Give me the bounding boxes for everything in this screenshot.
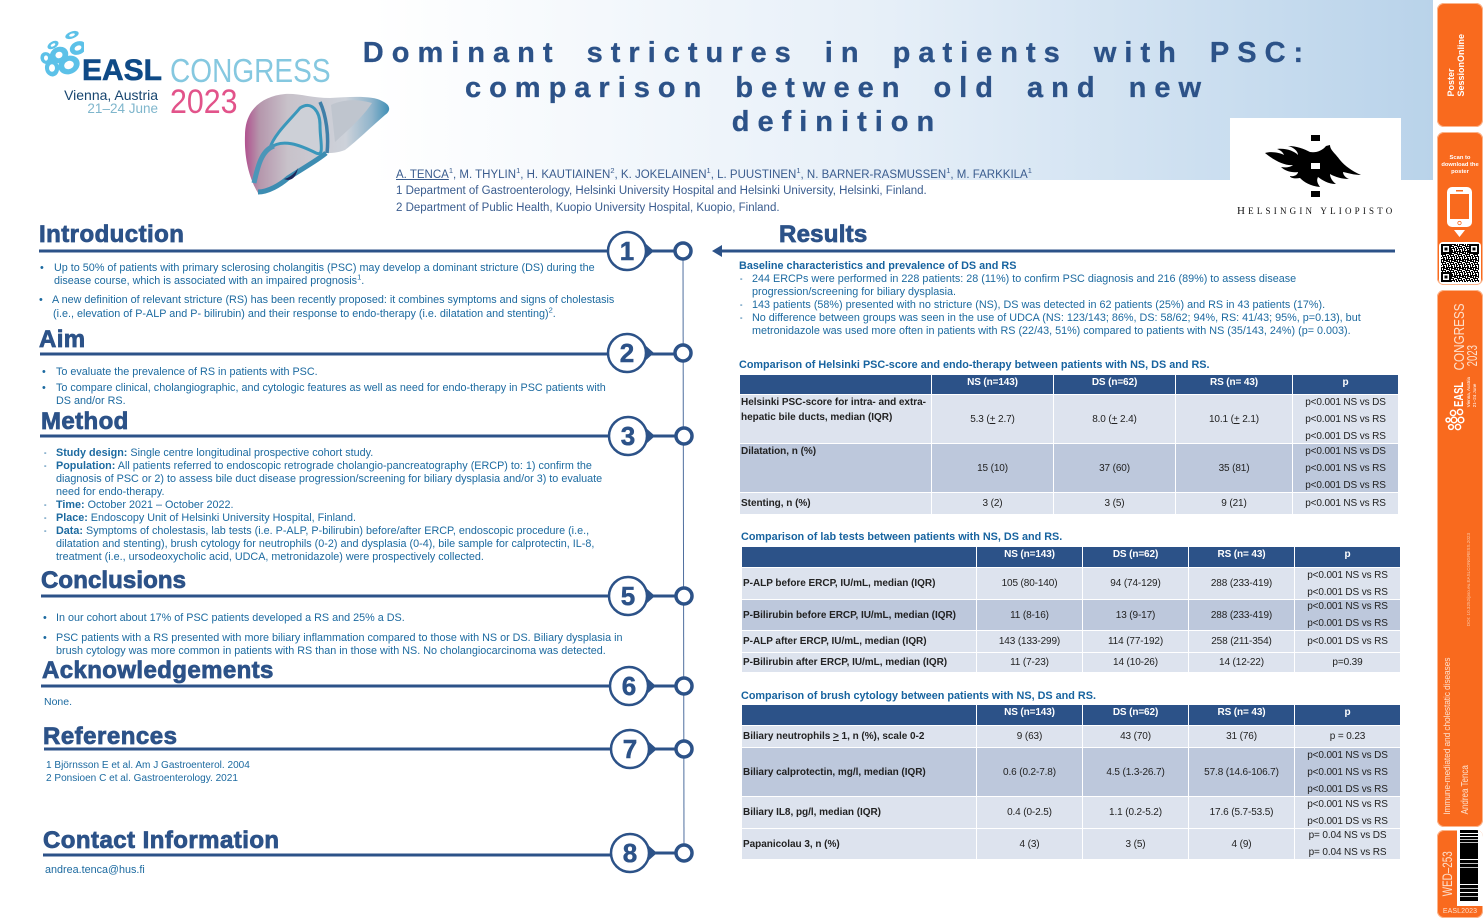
table: brush cytology: p<0.001 DS vs RS <box>1307 816 1388 827</box>
text: baseline characteristics: 244 ERCPs were performed in 228 patients: 28 (11%) to confirm PSC diagnosis and 216 (89%) to assess disease <box>752 273 1296 285</box>
text: references: 1 Björnsson E et al. Am J Gastroenterol. 2004 <box>46 760 250 771</box>
text: conclusions <box>43 612 622 657</box>
sidebar panel: scan to download <box>1437 132 1483 285</box>
sidebar panel: congress details <box>1437 290 1483 827</box>
sidebar year: 2023 <box>1464 345 1481 366</box>
heading: Introduction: Introduction <box>39 221 184 248</box>
text: method: diagnosis of PSC or 2) to assess bile duct disease progression/screening for biliary dysplasia and/or 3) to evaluate <box>56 473 602 485</box>
node 7: 7 <box>623 734 637 764</box>
QR code <box>1439 242 1481 284</box>
table: brush cytology: Biliary neutrophils > 1, n (%), scale 0-2 <box>743 731 924 742</box>
table: brush cytology: 0.4 (0-2.5) <box>1007 807 1052 818</box>
poster id: WED–253 <box>1440 851 1455 896</box>
scan instruction: poster <box>1451 169 1469 175</box>
text: aim: • <box>42 382 46 394</box>
table: brush cytology: Papanicolau 3, n (%) <box>743 838 840 850</box>
table: brush cytology: 0.6 (0.2-7.8) <box>1003 766 1056 778</box>
dates: 21–24 June <box>87 101 158 116</box>
table: lab tests: 288 (233-419) <box>1211 578 1272 589</box>
text: baseline characteristics: Baseline characteristics and prevalence of DS and RS <box>739 260 1016 272</box>
year: 2023 <box>170 83 238 121</box>
table: Helsinki PSC-score and endo-therapy: p<0.001 DS vs RS <box>1305 480 1386 491</box>
text: method: - <box>44 461 46 470</box>
table: Helsinki PSC-score and endo-therapy: p <box>1342 377 1348 388</box>
text: references <box>46 760 250 784</box>
table: brush cytology: Biliary IL8, pg/l, median (IQR) <box>743 807 881 818</box>
sidebar location: 21–24 June <box>1472 384 1477 407</box>
table: lab tests: 114 (77-192) <box>1108 636 1163 647</box>
text: conclusions: • <box>43 632 47 644</box>
authors and affiliations: A. TENCA1, M. THYLIN1, H. KAUTIAINEN2, K. JOKELAINEN1, L. PUUSTINEN1, N. BARNER-RASMUSSEN1, M. FARKKILA1 <box>396 166 1032 181</box>
text: introduction <box>39 262 614 320</box>
text: baseline characteristics: - <box>740 274 742 283</box>
text: aim: To evaluate the prevalence of RS in patients with PSC. <box>56 366 318 378</box>
text: aim: DS and/or RS. <box>56 395 126 407</box>
scan instruction: Scan to <box>1450 155 1470 161</box>
node 2 <box>40 334 691 372</box>
text: method: dilatation and stenting), brush cytology for neutrophils (0-2) and dysplasia (0-4), bile sample for calprotectin, IL-8, <box>56 538 594 550</box>
text: baseline characteristics: - <box>740 313 742 322</box>
text: acknowledgements: None. <box>44 696 72 708</box>
table: lab tests: 288 (233-419) <box>1211 610 1272 620</box>
table: brush cytology <box>742 705 1400 859</box>
timeline spine <box>683 251 684 853</box>
table: brush cytology: p= 0.04 NS vs RS <box>1309 847 1386 858</box>
title: comparison between old and new <box>465 72 1209 104</box>
table: Helsinki PSC-score and endo-therapy: p<0.001 NS vs DS <box>1305 396 1386 408</box>
table: brush cytology: p<0.001 DS vs RS <box>1307 784 1388 795</box>
text: baseline characteristics: No difference between groups was seen in the use of UDCA (NS: 123/143; 86%, DS: 58/62; 94%, RS: 41/43; 95%, p=0.13), but <box>752 312 1361 324</box>
text: method: - <box>44 526 46 535</box>
barcode <box>1457 830 1483 906</box>
icon: phone <box>1447 187 1472 237</box>
text: method: Population: All patients referred to endoscopic retrograde cholangio-pancreatography (ERCP) to: 1) confirm the <box>56 460 592 472</box>
table: Helsinki PSC-score and endo-therapy: NS (n=143) <box>967 377 1018 388</box>
EASL wordmark: EASL <box>82 54 162 87</box>
node 2: 2 <box>620 338 634 368</box>
sidebar congress wordmark: CONGRESS <box>1451 303 1468 370</box>
text: method: - <box>44 513 46 522</box>
table: Helsinki PSC-score and endo-therapy: DS (n=62) <box>1092 377 1137 388</box>
sidebar label: Poster Session Online: SessionOnline <box>1456 34 1466 97</box>
table: brush cytology: DS (n=62) <box>1113 707 1158 718</box>
logo wordmark: HELSINGIN YLIOPISTO <box>1237 205 1396 217</box>
table: lab tests <box>742 547 1400 672</box>
table: Helsinki PSC-score and endo-therapy: Helsinki PSC-score for intra- and extra- <box>741 397 926 408</box>
table: lab tests: 258 (211-354) <box>1211 636 1272 647</box>
text: method: Data: Symptoms of cholestasis, lab tests (i.e. P-ALP, P-bilirubin) before/after ERCP, endoscopic procedure (i.e., <box>56 525 589 537</box>
icon: hexagon cluster <box>40 30 84 76</box>
authors and affiliations: 2 Department of Public Health, Kuopio University Hospital, Kuopio, Finland. <box>396 202 780 214</box>
table: brush cytology: 3 (5) <box>1126 838 1145 850</box>
text: introduction: (i.e., elevation of P-ALP and P- bilirubin) and their response to endo-therapy (i.e. dilatation and stenting)2. <box>53 305 556 320</box>
table: brush cytology: 4 (3) <box>1020 838 1039 850</box>
text: conclusions: • <box>43 612 47 624</box>
node 5: 5 <box>621 581 635 611</box>
authors and affiliations: 1 Department of Gastroenterology, Helsinki University Hospital and Helsinki University, Helsinki, Finland. <box>396 185 927 197</box>
text: introduction: disease course, which is associated with an impaired prognosis1. <box>54 272 364 287</box>
table caption: brush cytology: Comparison of brush cytology between patients with NS, DS and RS. <box>741 690 1096 702</box>
text: baseline characteristics: - <box>740 300 742 309</box>
node 6: 6 <box>622 671 636 701</box>
node 3: 3 <box>621 421 635 451</box>
table: lab tests: 11 (7-23) <box>1010 657 1049 668</box>
table: Helsinki PSC-score and endo-therapy: 10.1 (+ 2.1) <box>1209 414 1259 424</box>
text: contact email: andrea.tenca@hus.fi <box>45 864 145 876</box>
table: Helsinki PSC-score and endo-therapy: 3 (2) <box>983 498 1002 509</box>
heading: Method: Method <box>41 408 129 435</box>
table: brush cytology: p<0.001 NS vs RS <box>1307 767 1388 778</box>
authors and affiliations <box>396 166 1032 214</box>
table: Helsinki PSC-score and endo-therapy: 3 (5) <box>1105 498 1124 509</box>
sidebar EASL mark: EASL <box>1451 382 1466 407</box>
icon: flame emblem <box>1265 135 1361 197</box>
title <box>363 37 1311 138</box>
text: conclusions: PSC patients with a RS presented with more biliary inflammation compared to those with NS or DS. Biliary dysplasia in <box>56 632 622 644</box>
text: baseline characteristics <box>739 260 1361 337</box>
node 1 <box>39 232 691 270</box>
text: introduction: A new definition of relevant stricture (RS) has been recently proposed: it combines symptoms and signs of cholestasis <box>52 294 614 306</box>
table: brush cytology: 17.6 (5.7-53.5) <box>1210 807 1273 818</box>
table: brush cytology: p<0.001 NS vs RS <box>1307 798 1388 810</box>
text: introduction: • <box>40 262 44 274</box>
table: Helsinki PSC-score and endo-therapy: 8.0 (+ 2.4) <box>1092 414 1137 424</box>
topic: Immune-mediated and cholestatic diseases <box>1442 658 1453 815</box>
table: brush cytology: 31 (76) <box>1226 731 1257 742</box>
sidebar panel: poster id and barcode <box>1437 830 1483 918</box>
text: aim: • <box>42 366 46 378</box>
table: Helsinki PSC-score and endo-therapy: p<0.001 NS vs RS <box>1305 498 1386 509</box>
logo: University of Helsinki <box>1230 118 1401 218</box>
table: lab tests: p<0.001 NS vs RS <box>1307 570 1388 580</box>
sidebar label: Poster Session Online: Poster <box>1446 69 1456 97</box>
text: baseline characteristics: 143 patients (58%) presented with no stricture (NS), DS was detected in 62 patients (25%) and RS in 43 patients (17%). <box>752 299 1325 311</box>
table: Helsinki PSC-score and endo-therapy: Dilatation, n (%) <box>741 446 816 457</box>
node 8 <box>43 834 692 872</box>
text: introduction: • <box>39 294 43 306</box>
table: lab tests: RS (n= 43) <box>1218 549 1265 560</box>
table: brush cytology: 57.8 (14.6-106.7) <box>1204 766 1279 778</box>
text: conclusions: In our cohort about 17% of PSC patients developed a RS and 25% a DS. <box>56 612 405 624</box>
sidebar location: Vienna, Austria <box>1466 377 1471 407</box>
text: references: 2 Ponsioen C et al. Gastroenterology. 2021 <box>46 773 238 784</box>
table: Helsinki PSC-score and endo-therapy: 15 (10) <box>977 462 1008 474</box>
heading: Conclusions: Conclusions <box>41 567 186 594</box>
text: method: Place: Endoscopy Unit of Helsinki University Hospital, Finland. <box>56 512 356 524</box>
table: brush cytology: p<0.001 NS vs DS <box>1307 750 1388 760</box>
table caption: lab tests: Comparison of lab tests between patients with NS, DS and RS. <box>741 531 1062 543</box>
text: aim <box>42 366 606 407</box>
table: lab tests: p=0.39 <box>1332 657 1363 668</box>
text: method: Time: October 2021 – October 2022. <box>56 499 233 511</box>
table: lab tests: 11 (8-16) <box>1010 610 1049 620</box>
text: method: Study design: Single centre longitudinal prospective cohort study. <box>56 447 373 459</box>
header gradient band <box>0 0 1433 180</box>
scan instruction <box>1441 155 1479 175</box>
table: brush cytology: p = 0.23 <box>1330 731 1365 742</box>
text: method: treatment (i.e., ursodeoxycholic acid, UDCA, metronidazole) were prospectively collected. <box>56 551 484 563</box>
table: Helsinki PSC-score and endo-therapy: p<0.001 NS vs RS <box>1305 414 1386 425</box>
table: brush cytology: 4 (9) <box>1232 838 1251 850</box>
scan instruction: download the <box>1441 162 1479 168</box>
text: method <box>44 447 602 563</box>
node 3 <box>40 417 692 455</box>
text: introduction: Up to 50% of patients with primary sclerosing cholangitis (PSC) may develop a dominant stricture (DS) during the <box>54 262 595 274</box>
table: lab tests: 105 (80-140) <box>1002 578 1057 589</box>
node 7 <box>44 730 692 768</box>
node 8: 8 <box>623 838 637 868</box>
location: Vienna, Austria <box>64 87 158 103</box>
table: Helsinki PSC-score and endo-therapy: 9 (21) <box>1221 498 1247 509</box>
text: method: - <box>44 448 46 457</box>
logo: EASL Congress 2023 <box>40 30 331 121</box>
table: lab tests: 14 (10-26) <box>1113 657 1158 668</box>
title: definition <box>732 106 942 138</box>
heading: Results: Results <box>779 221 867 248</box>
heading: Acknowledgements: Acknowledgements <box>42 657 274 684</box>
table: lab tests: p<0.001 DS vs RS <box>1307 636 1388 647</box>
node 1: 1 <box>620 236 634 266</box>
icon: sidebar hexagon cluster <box>1445 408 1464 430</box>
DOI: DOI: 10.3252/pso.eu.EASLCONGRESS.2023 <box>1466 533 1471 626</box>
table: lab tests: 94 (74-129) <box>1110 578 1161 589</box>
table: Helsinki PSC-score and endo-therapy: 5.3 (+ 2.7) <box>970 414 1015 424</box>
table: Helsinki PSC-score and endo-therapy: Stenting, n (%) <box>741 498 811 509</box>
text: conclusions: brush cytology was more common in patients with RS than in those with NS. No cholangiocarcinoma was detected. <box>56 645 606 657</box>
table: lab tests: NS (n=143) <box>1004 549 1055 560</box>
table: brush cytology: NS (n=143) <box>1004 707 1055 718</box>
congress tag: EASL2023 <box>1443 908 1477 915</box>
title: Dominant strictures in patients with PSC: <box>363 37 1311 69</box>
text: aim: To compare clinical, cholangiographic, and cytologic features as well as need for endo-therapy in PSC patients with <box>56 382 606 394</box>
table: brush cytology: 1.1 (0.2-5.2) <box>1109 807 1162 818</box>
table: lab tests: P-ALP after ERCP, IU/mL, median (IQR) <box>743 636 927 647</box>
table: brush cytology: 9 (63) <box>1017 731 1042 742</box>
sidebar panel: poster session online <box>1437 3 1483 127</box>
table: Helsinki PSC-score and endo-therapy: p<0.001 NS vs RS <box>1305 463 1386 474</box>
table: lab tests: p<0.001 NS vs RS <box>1307 601 1388 612</box>
text: method: - <box>44 500 46 509</box>
text: method: need for endo-therapy. <box>56 486 164 498</box>
table: brush cytology: Biliary calprotectin, mg/l, median (IQR) <box>743 766 926 778</box>
table: lab tests: p <box>1344 549 1350 560</box>
text: baseline characteristics: metronidazole was used more often in patients with RS (22/43, 51%) compared to patients with NS (35/143, 24%) (p= 0.003). <box>752 325 1351 337</box>
table: Helsinki PSC-score and endo-therapy: p<0.001 DS vs RS <box>1305 431 1386 442</box>
results arrow rule <box>712 245 1395 257</box>
heading: Aim: Aim <box>39 326 86 353</box>
sidebar label: Poster Session Online <box>1446 34 1466 97</box>
table: Helsinki PSC-score and endo-therapy: hepatic bile ducts, median (IQR) <box>741 412 892 423</box>
node 5 <box>41 577 692 615</box>
table: brush cytology: RS (n= 43) <box>1218 707 1265 718</box>
node 6 <box>41 667 692 705</box>
table: brush cytology: 4.5 (1.3-26.7) <box>1106 766 1165 778</box>
CONGRESS wordmark: CONGRESS <box>170 52 331 89</box>
table: Helsinki PSC-score and endo-therapy: RS (n= 43) <box>1210 377 1258 388</box>
table: lab tests: p<0.001 DS vs RS <box>1307 618 1388 629</box>
table: Helsinki PSC-score and endo-therapy <box>740 375 1398 514</box>
table: brush cytology: p= 0.04 NS vs DS <box>1309 830 1386 841</box>
table: lab tests: 143 (133-299) <box>999 636 1060 647</box>
table: lab tests: P-ALP before ERCP, IU/mL, median (IQR) <box>743 578 935 589</box>
sidebar location <box>1466 377 1477 408</box>
table: Helsinki PSC-score and endo-therapy: 37 (60) <box>1099 462 1130 474</box>
table: lab tests: DS (n=62) <box>1113 549 1158 560</box>
table: lab tests: p<0.001 DS vs RS <box>1307 587 1388 598</box>
table: brush cytology: 43 (70) <box>1120 731 1151 742</box>
heading: References: References <box>43 723 177 750</box>
table: Helsinki PSC-score and endo-therapy: p<0.001 NS vs DS <box>1305 446 1386 456</box>
table: lab tests: 13 (9-17) <box>1116 610 1155 620</box>
author: Andrea Tenca <box>1460 765 1471 814</box>
table: brush cytology: p <box>1344 707 1350 718</box>
text: baseline characteristics: progression/screening for biliary dysplasia. <box>752 286 956 298</box>
table: lab tests: P-Bilirubin before ERCP, IU/mL, median (IQR) <box>743 610 956 620</box>
heading: Contact Information: Contact Information <box>43 827 280 854</box>
table caption: PSC-score: Comparison of Helsinki PSC-score and endo-therapy between patients with NS, DS and RS. <box>739 359 1210 371</box>
table: lab tests: P-Bilirubin after ERCP, IU/mL, median (IQR) <box>743 657 947 668</box>
table: lab tests: 14 (12-22) <box>1219 657 1264 668</box>
table: Helsinki PSC-score and endo-therapy: 35 (81) <box>1219 462 1249 474</box>
icon: liver <box>244 94 390 194</box>
